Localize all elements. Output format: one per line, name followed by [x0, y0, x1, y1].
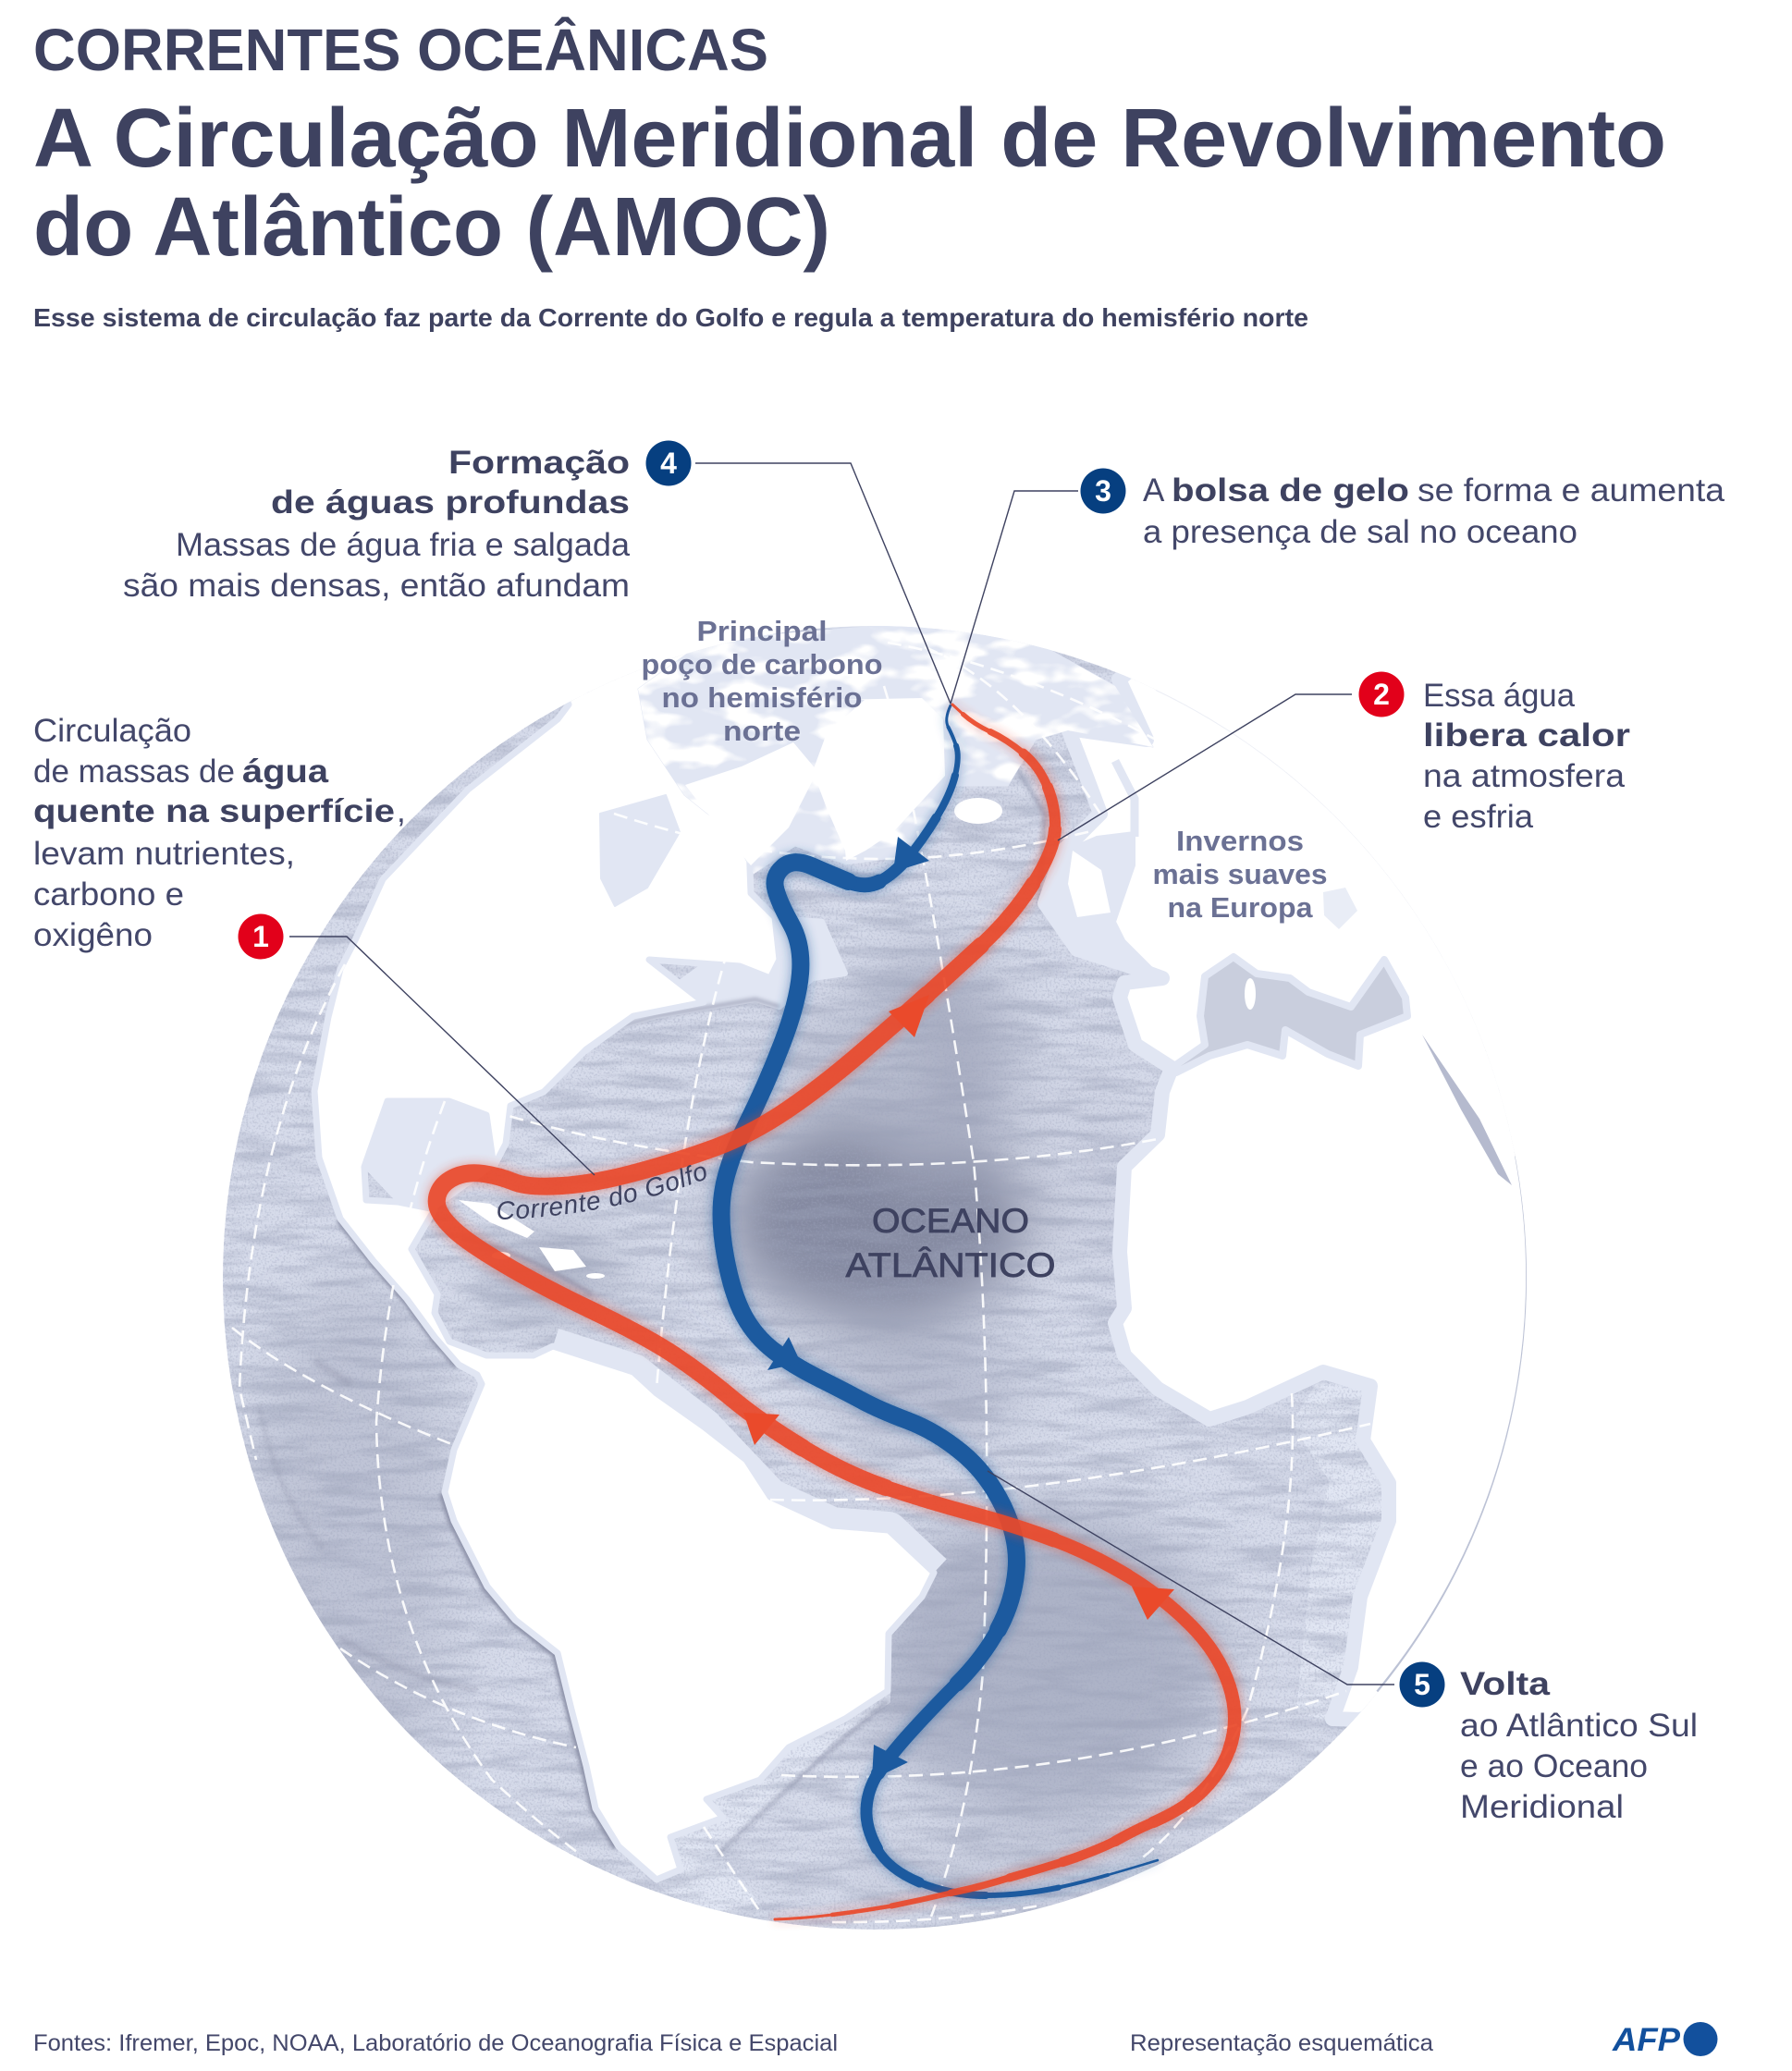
- text 1: de massas de: [33, 754, 235, 790]
- text 2: [1423, 678, 1630, 835]
- map: globe with ocean floor: [223, 626, 1527, 1930]
- badge 5: [1400, 1662, 1444, 1707]
- callout 5: [988, 1471, 1698, 1825]
- Black Sea: [1323, 888, 1357, 929]
- Iceland: [954, 798, 1002, 824]
- footer: sources: Fontes: Ifremer, Epoc, NOAA, Laboratório de Oceanografia Física e Espacial: [33, 2030, 838, 2056]
- blue arrowheads: [767, 837, 929, 1780]
- text 1: água: [242, 754, 329, 790]
- path for Corrente do Golfo label: [497, 1176, 714, 1219]
- text 4: [123, 445, 631, 604]
- text 3: bolsa de gelo: [1172, 472, 1409, 509]
- ocean base: [223, 626, 1347, 1930]
- continental shelves: [364, 917, 934, 1573]
- label: invernos mais suaves: na Europa: [1167, 891, 1313, 924]
- text 5: e ao Oceano: [1460, 1748, 1648, 1784]
- label: principal poço de carbono: Principal: [697, 615, 827, 647]
- callout 4: [123, 440, 951, 704]
- text 3: se forma e aumenta: [1418, 472, 1725, 509]
- trenches and shelf breaks: [259, 767, 1048, 1857]
- text 1: carbono e: [33, 876, 184, 913]
- badge 4: 4: [660, 447, 677, 480]
- footer: note: Representação esquemática: [1130, 2030, 1433, 2056]
- red surface current: [436, 705, 1234, 1919]
- Greenland: [813, 698, 945, 861]
- text 2: Essa água: [1423, 678, 1576, 714]
- title: do Atlântico (AMOC): [33, 181, 830, 274]
- North Sea shelf: [1045, 832, 1162, 978]
- Indian Ocean sliver: [1422, 1035, 1512, 1185]
- blue deep current: [721, 705, 1158, 1895]
- label: principal poço de carbono: norte: [723, 715, 801, 747]
- text 1: levam nutrientes,: [33, 836, 295, 872]
- text 4: são mais densas, então afundam: [123, 568, 630, 604]
- Hudson Bay: [600, 795, 680, 906]
- label: invernos mais suaves: [1152, 825, 1328, 924]
- Britain: [1068, 851, 1111, 917]
- text 1: ,: [397, 793, 406, 829]
- globe limb: [1156, 690, 1528, 1692]
- text 4: de águas profundas: [271, 484, 630, 521]
- African and Patagonian shelves under texture: [657, 1378, 1389, 1918]
- title: A Circulação Meridional de Revolvimento: [33, 92, 1666, 185]
- text 3: a presença de sal no oceano: [1143, 514, 1577, 550]
- label: invernos mais suaves: mais suaves: [1152, 858, 1328, 890]
- kicker: correntes oceânicas: CORRENTES OCEÂNICAS: [33, 16, 768, 83]
- label: Oceano Atlântico: [845, 1202, 1056, 1284]
- label: principal poço de carbono: no hemisfério: [662, 681, 862, 714]
- label: Oceano Atlântico: OCEANO: [872, 1202, 1029, 1240]
- text 1: [33, 713, 406, 953]
- ocean texture specks: [223, 629, 1381, 1930]
- graticule: [232, 643, 1370, 1922]
- subtitle: Esse sistema de circulação faz parte da Corrente do Golfo e regula a temperatura do hemisfério norte: [33, 303, 1308, 332]
- ocean texture streaks: [223, 629, 1381, 1929]
- text 1: Circulação: [33, 713, 191, 749]
- Caribbean islands: [459, 1200, 605, 1279]
- red arrowheads: [743, 995, 1174, 1620]
- text 3: A: [1143, 472, 1165, 509]
- badge 5: 5: [1414, 1668, 1430, 1701]
- Baffin land: [685, 742, 817, 865]
- text 4: Formação: [448, 445, 630, 481]
- Baltic: [1115, 761, 1135, 837]
- arctic white mottling: [638, 630, 1153, 874]
- label: Oceano Atlântico: ATLÂNTICO: [845, 1246, 1056, 1284]
- callout 2: [1058, 671, 1630, 840]
- text 5: Volta: [1460, 1666, 1551, 1702]
- text 1: quente na superfície: [33, 793, 395, 829]
- text 1: oxigêno: [33, 917, 153, 953]
- text 5: [1460, 1666, 1698, 1825]
- text 5: Meridional: [1460, 1789, 1624, 1825]
- label: invernos mais suaves: Invernos: [1176, 825, 1304, 857]
- text 2: libera calor: [1423, 717, 1630, 754]
- label: principal poço de carbono: [642, 615, 882, 747]
- badge 3: [1080, 468, 1126, 514]
- badge 1: 1: [252, 920, 269, 953]
- label: Corrente do Golfo: Corrente do Golfo: [497, 1165, 706, 1219]
- land: Europe and Africa: [1045, 610, 1664, 1720]
- text 3: [1143, 472, 1725, 550]
- ocean depth shading: [250, 952, 1276, 1909]
- text 4: Massas de água fria e salgada: [176, 527, 631, 563]
- label: principal poço de carbono: poço de carbono: [642, 648, 882, 680]
- Mediterranean: [1174, 957, 1407, 1072]
- callout 3: [951, 468, 1725, 704]
- badge 3: 3: [1095, 474, 1111, 508]
- arctic shelf: [638, 626, 1153, 874]
- badge 2: 2: [1373, 678, 1390, 711]
- badge 2: [1359, 671, 1404, 717]
- logo: AFP: [1612, 2022, 1718, 2058]
- title: [33, 92, 1666, 274]
- callout 1: [33, 713, 595, 1175]
- logo: AFP: AFP: [1612, 2022, 1681, 2058]
- badge 4: [645, 440, 692, 486]
- land: the Americas: [314, 592, 934, 1880]
- Corsica and Sardinia: [1245, 978, 1256, 1010]
- text 2: na atmosfera: [1423, 758, 1626, 794]
- text 2: e esfria: [1423, 799, 1534, 835]
- text 5: ao Atlântico Sul: [1460, 1708, 1698, 1744]
- badge 1: [239, 913, 283, 960]
